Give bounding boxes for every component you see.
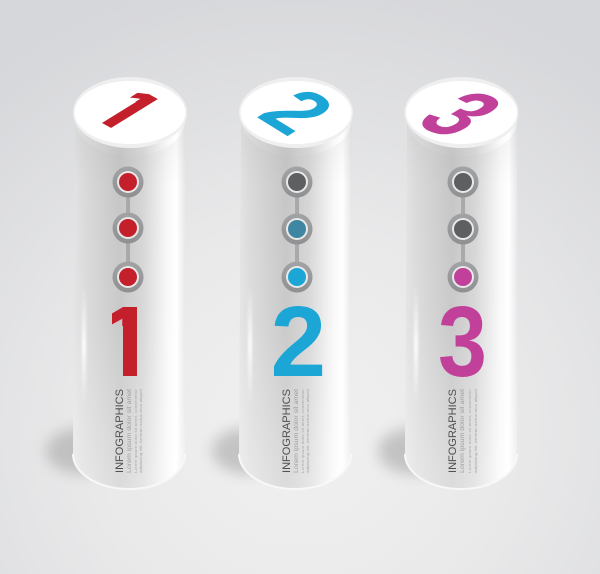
top digit 2: 2 xyxy=(240,76,354,147)
panel: cylinder 1 xyxy=(46,76,187,490)
top shadow 2 xyxy=(241,120,352,185)
bottom lip 3 xyxy=(405,454,517,489)
caption 3: Lorem ipsum dolor sit amet xyxy=(459,389,466,473)
top face 2 xyxy=(240,81,352,144)
big number 1: 1 xyxy=(96,287,158,398)
step dot 2a xyxy=(282,166,312,198)
top digit 3: 3 xyxy=(394,78,528,150)
highlight streak 2 xyxy=(248,285,252,405)
step dot 1a xyxy=(112,166,144,198)
step dot 2c xyxy=(282,262,312,292)
body fade 2 xyxy=(239,115,352,490)
cylinder body 1 xyxy=(73,115,186,490)
top rim 3 xyxy=(404,77,518,148)
step dot 1b xyxy=(112,212,144,244)
caption 1: Lorem ipsum dolor sit amet xyxy=(126,389,133,473)
top digit 1: 1 xyxy=(70,76,185,145)
caption 1 xyxy=(114,388,143,473)
caption 2 xyxy=(281,388,310,473)
caption 1: INFOGRAPHICS xyxy=(114,389,126,473)
top rim 2 xyxy=(239,77,353,148)
big number 2: 2 xyxy=(270,286,326,398)
top rim 1 xyxy=(73,77,187,148)
cylinder body 3 xyxy=(405,115,518,490)
caption 2: Lorem ipsum dolor sit amet xyxy=(293,389,300,473)
cast shadow 1 xyxy=(46,428,118,474)
bottom lip 1 xyxy=(73,454,185,489)
caption 3: INFOGRAPHICS xyxy=(447,389,459,473)
body fade 3 xyxy=(405,115,518,490)
top shadow 3 xyxy=(407,120,518,185)
highlight streak 3 xyxy=(414,285,418,405)
bottom lip 2 xyxy=(239,454,351,489)
step dot 3a xyxy=(448,166,478,198)
caption 1: adipiscing elit. Aenean luctus arcu aliquet xyxy=(138,388,143,473)
panel: cylinder 3 xyxy=(378,77,528,490)
step dot 3c xyxy=(448,262,478,292)
top face 3 xyxy=(406,81,517,144)
big number 3: 3 xyxy=(438,286,487,397)
caption 3: adipiscing elit. Aenean luctus arcu aliquet xyxy=(473,388,478,473)
panel: cylinder 2 xyxy=(212,76,354,490)
cast shadow 3 xyxy=(378,428,450,474)
cylinder body 2 xyxy=(239,115,352,490)
step dot 2b xyxy=(282,214,312,244)
connector lines 2 xyxy=(295,190,299,270)
caption 3: Lorem ipsum dolor sit amet, consectetur xyxy=(467,388,472,473)
connector lines 3 xyxy=(461,190,465,270)
body fade 1 xyxy=(73,115,186,490)
caption 3 xyxy=(447,388,478,473)
caption 2: Lorem ipsum dolor sit amet, consectetur xyxy=(300,388,305,473)
step dot 1c xyxy=(112,262,144,292)
cast shadow 2 xyxy=(212,428,284,474)
caption 1: Lorem ipsum dolor sit amet, consectetur xyxy=(133,388,138,473)
caption 2: adipiscing elit. Aenean luctus arcu aliquet xyxy=(305,388,310,473)
connector lines 1 xyxy=(126,190,130,270)
top face 1 xyxy=(74,81,186,144)
top shadow 1 xyxy=(75,120,186,185)
caption 2: INFOGRAPHICS xyxy=(281,389,293,473)
step dot 3b xyxy=(448,214,478,244)
highlight streak 1 xyxy=(82,285,86,405)
